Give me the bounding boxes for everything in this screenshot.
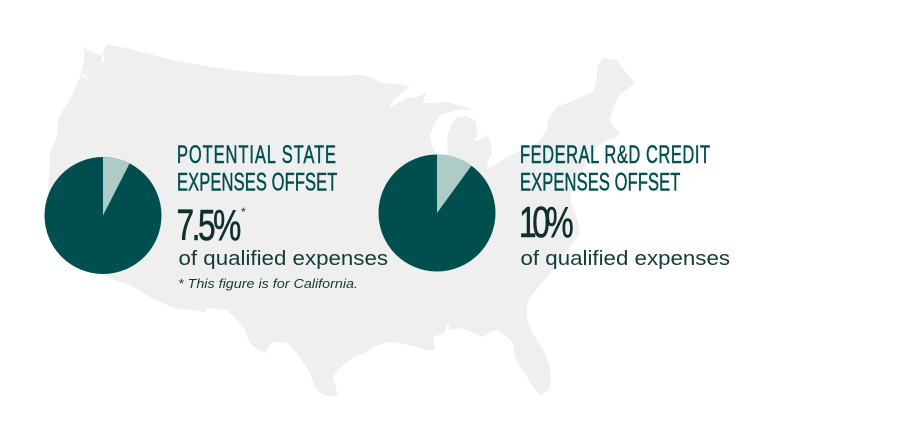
- figure: 7.5 percent: 7.5%: [176, 201, 241, 250]
- heading: potential state expenses offset: EXPENSES OFFSET: [177, 169, 337, 196]
- text block: federal R&D credit: [519, 142, 730, 270]
- heading: potential state expenses offset: [177, 142, 337, 196]
- footnote: California: * This figure is for California.: [178, 276, 358, 291]
- caption: of qualified expenses: of qualified expenses: [178, 248, 388, 270]
- heading: federal R&D credit expenses offset: EXPENSES OFFSET: [520, 169, 680, 196]
- text block: potential state expenses: [176, 142, 388, 291]
- heading: federal R&D credit expenses offset: FEDERAL R&D CREDIT: [520, 142, 710, 169]
- figure: 10 percent: 10%: [519, 198, 574, 247]
- background map: United States: [48, 44, 635, 397]
- pie chart: federal credit offset 10%: [378, 154, 496, 272]
- figure: 7.5 percent: *: [241, 205, 246, 219]
- caption: of qualified expenses: of qualified expenses: [520, 248, 730, 270]
- heading: federal R&D credit expenses offset: [520, 142, 710, 196]
- pie chart: potential state offset 7.5%: [44, 157, 162, 274]
- heading: potential state expenses offset: POTENTIAL STATE: [177, 142, 336, 169]
